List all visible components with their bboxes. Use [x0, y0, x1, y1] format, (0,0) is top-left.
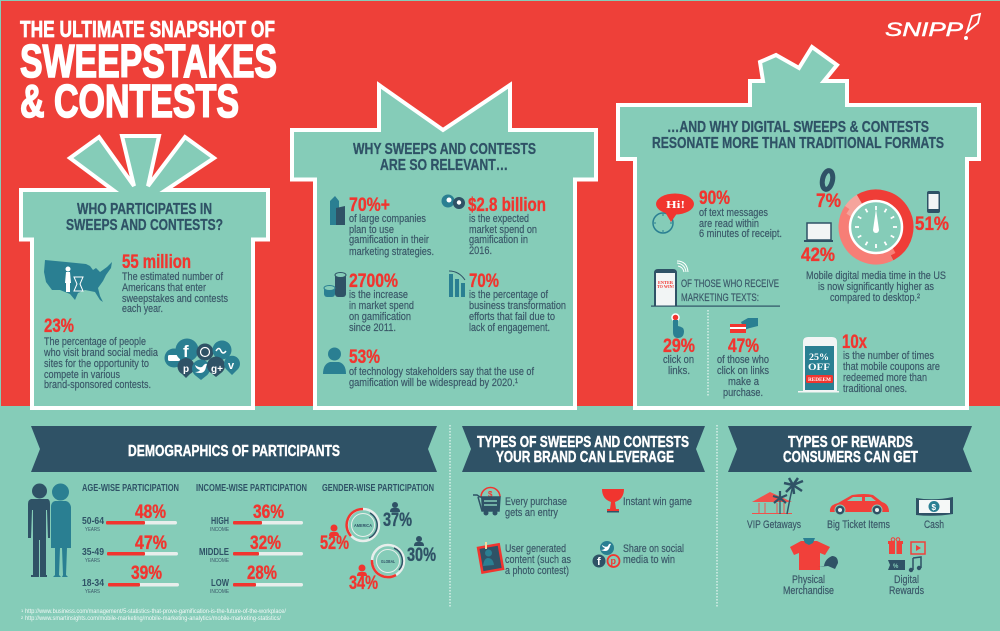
text: digital rewards: Digital — [894, 574, 919, 586]
icon: laptop — [804, 223, 833, 242]
icon: enter to win phone — [654, 261, 688, 306]
logo: Snipp: SNIPP — [885, 20, 963, 41]
icon: coupon phone: OFF — [808, 363, 830, 373]
stat: 70%+ — [349, 195, 434, 258]
stat: 70%: lack of engagement. — [469, 322, 550, 334]
chart: age-wise participation: AGE-WISE PARTICIPATION — [82, 483, 179, 494]
stat: 53% — [349, 347, 535, 389]
icon: phone — [927, 191, 940, 213]
stat: 90%: 6 minutes of receipt. — [699, 228, 782, 240]
icon: social media bubbles: p — [183, 364, 189, 375]
stat: 29% — [663, 336, 695, 377]
text: physical merchandise — [783, 574, 834, 597]
title: & CONTESTS — [20, 75, 239, 127]
icon: coupon phone: 25% — [809, 353, 829, 363]
banner: types of rewards — [728, 426, 972, 472]
stat: 47%: purchase. — [723, 387, 763, 399]
stat: 23%: compete in various — [44, 369, 120, 381]
row high: HIGH — [211, 516, 229, 527]
footnotes: 2 — [21, 615, 24, 620]
footnotes — [21, 608, 286, 622]
icon: enter to win phone: TO WIN! — [657, 285, 674, 289]
stat: 2700%: in market spend — [349, 300, 414, 312]
row 50-64: 48% — [135, 502, 166, 523]
stat: 2.8 billion: $2.8 billion — [468, 195, 546, 216]
gift shape left — [21, 136, 268, 408]
stat: 55 million — [122, 252, 228, 315]
stat: 55 million: each year. — [122, 303, 163, 315]
heading: why relevant — [353, 141, 536, 174]
stat: 23% — [43, 316, 159, 391]
row 50-64 — [82, 502, 177, 533]
stat: 29%: click on — [663, 354, 694, 366]
stat: 29%: links. — [668, 365, 690, 377]
label: 37%: 37% — [383, 510, 412, 531]
text: share on social: media to win — [623, 554, 675, 566]
text: digital rewards — [889, 574, 924, 597]
icon: trophy — [602, 489, 624, 512]
row 35-49: 47% — [135, 533, 167, 554]
banner: types of sweeps: YOUR BRAND CAN LEVERAGE — [496, 449, 674, 466]
label: Big Ticket Items: Big Ticket Items — [827, 519, 890, 531]
icon: coupon phone — [798, 337, 839, 392]
icon: social media bubbles: f — [183, 342, 189, 361]
banner: types of rewards: CONSUMERS CAN GET — [783, 449, 918, 466]
icon: digital rewards: % — [893, 564, 899, 570]
row high: INCOME — [210, 527, 229, 533]
banner: demographics — [31, 426, 437, 472]
icon: declining bar chart — [449, 271, 465, 297]
icon: hand with credit card — [730, 318, 758, 333]
row 18-34: YEARS — [85, 589, 100, 595]
stat: 23%: 23% — [44, 316, 74, 337]
stat: 2.8 billion: is the expected — [469, 213, 529, 225]
icon: man and woman — [28, 484, 71, 577]
row low: LOW — [211, 578, 229, 589]
text: of those who receive: OF THOSE WHO RECEIVE — [681, 278, 779, 290]
heading: why digital: …AND WHY DIGITAL SWEEPS & CONTESTS — [667, 119, 929, 136]
icon: social share: f — [597, 556, 601, 568]
text: mobile digital media: compared to desktop.² — [830, 292, 920, 304]
stat: 2700%: since 2011. — [349, 322, 396, 334]
stat: 10x: that mobile coupons are — [843, 361, 940, 373]
icon: social media bubbles — [164, 338, 240, 380]
stat: 70%: business transformation — [469, 300, 566, 312]
row low: 28% — [247, 563, 277, 584]
icon: coin stacks — [324, 272, 346, 297]
ring: America: AMERICA — [354, 523, 373, 528]
banner: types of sweeps — [462, 426, 705, 472]
text: user generated: User generated — [505, 543, 566, 555]
text: every purchase: gets an entry — [505, 507, 558, 519]
stat: 10x — [842, 332, 940, 395]
text: user generated: a photo contest) — [505, 565, 569, 577]
panel: who participates — [21, 136, 268, 408]
red header background — [1, 1, 1000, 406]
row high: 36% — [253, 502, 284, 523]
stat: 70%: 70% — [469, 271, 499, 292]
stat: 47%: click on links — [717, 365, 769, 377]
banner: demographics: DEMOGRAPHICS OF PARTICIPANTS — [128, 443, 340, 460]
icon: cash — [916, 497, 953, 516]
stat: 2.8 billion: gamification in — [469, 234, 528, 246]
icon: beach hut with palms — [752, 478, 803, 514]
chart: gender-wise participation — [320, 483, 436, 594]
icon: touch finger — [672, 314, 684, 338]
stat: 55 million: sweepstakes and contests — [122, 293, 228, 305]
stat: 55 million: Americans that enter — [122, 282, 206, 294]
label: 52%: 52% — [320, 533, 349, 554]
stat: 53%: gamification will be widespread by 2020.¹ — [349, 377, 518, 389]
icon: photo — [478, 542, 503, 573]
stat: 2.8 billion: 2016. — [469, 245, 492, 257]
text: share on social — [623, 543, 684, 566]
text: every purchase — [505, 496, 567, 519]
gift shape right — [618, 47, 979, 408]
icon: person navy global — [414, 536, 424, 546]
text: user generated — [505, 543, 571, 577]
text: digital rewards: Rewards — [889, 585, 924, 597]
stat: 2.8 billion: market spend on — [469, 224, 537, 236]
stat: 55 million: 55 million — [122, 252, 191, 273]
stat: 23%: brand-sponsored contests. — [44, 379, 151, 391]
dotted separators — [450, 425, 717, 608]
stat: 70% — [469, 271, 566, 334]
stat: 90% — [699, 188, 782, 240]
footnotes: 1 — [21, 608, 24, 613]
stat: 90%: 90% — [699, 188, 730, 209]
chart: mobile media donut — [832, 183, 920, 271]
icon: enter to win phone: ENTER — [658, 281, 673, 285]
row 35-49 — [82, 533, 178, 564]
heading: why relevant: ARE SO RELEVANT… — [380, 157, 508, 174]
stat: 47%: make a — [728, 376, 760, 388]
heading: who participates — [66, 201, 223, 234]
banner: types of rewards: TYPES OF REWARDS — [788, 434, 913, 451]
label: 34%: 34% — [349, 573, 378, 594]
text: physical merchandise: Merchandise — [783, 585, 834, 597]
stat: 47%: of those who — [717, 354, 769, 366]
chart: gender-wise participation: GENDER-WISE PARTICIPATION — [322, 483, 434, 494]
chart: income-wise participation — [196, 483, 307, 595]
icon: Hi bubble and clock: Hi! — [666, 199, 685, 211]
icon: person navy — [390, 502, 400, 512]
stat: 29%: 29% — [663, 336, 695, 357]
icon: shirt and cap — [790, 538, 838, 570]
text: mobile digital media: is now significantly higher as — [818, 281, 934, 293]
stat: 47% — [717, 336, 769, 399]
stat: 2700%: on gamification — [349, 311, 411, 323]
row 50-64: 50-64 — [82, 516, 104, 527]
stat: 23%: The percentage of people — [44, 336, 146, 348]
ring: Global: GLOBAL — [381, 559, 395, 564]
icon: shopping cart with coin — [473, 488, 500, 516]
icon: US map with figure and trophy — [44, 260, 112, 302]
row 18-34: 18-34 — [82, 578, 104, 589]
heading: who participates: WHO PARTICIPATES IN — [77, 201, 212, 218]
panel: why digital — [618, 47, 979, 408]
stat: 10x: redeemed more than — [843, 372, 927, 384]
stat: 53%: of technology stakeholders say that the use of — [349, 366, 535, 378]
row middle: 32% — [250, 533, 281, 554]
stat: 70%: is the percentage of — [469, 289, 549, 301]
stat: 70%+: of large companies — [349, 213, 426, 225]
icon: social share: p — [610, 556, 616, 566]
icon: cash: $ — [932, 503, 936, 512]
stat: 10x: is the number of times — [843, 350, 934, 362]
text: user generated: content (such as — [505, 554, 571, 566]
stat: 2700%: 2700% — [349, 271, 398, 292]
icon: shopping cart with coin: $ — [488, 490, 493, 499]
icon: car — [830, 494, 889, 515]
row 50-64: YEARS — [85, 527, 100, 533]
text: physical merchandise: Physical — [792, 574, 825, 586]
footnotes: http://www.business.com/management/5-statistics-that-prove-gamification-is-the-future-of-the-workplace/ — [25, 609, 286, 615]
stat: 23%: who visit brand social media — [43, 347, 159, 359]
row 18-34: 39% — [131, 563, 162, 584]
title: THE ULTIMATE SNAPSHOT OF — [20, 16, 275, 42]
icon: person red global — [357, 564, 367, 576]
stat: 10x: 10x — [842, 332, 867, 353]
icon: person with glasses — [323, 348, 346, 374]
logo: Snipp — [885, 14, 980, 41]
stat: 70%+: gamification in their — [349, 234, 429, 246]
icon: buildings — [330, 196, 345, 225]
text: instant win game: Instant win game — [623, 496, 692, 508]
label: 7%: 7% — [816, 191, 841, 212]
row middle: MIDDLE — [199, 547, 229, 558]
stat: 70%: efforts that fail due to — [469, 311, 555, 323]
row middle — [199, 533, 303, 564]
panel: why relevant — [292, 85, 596, 408]
chart: age-wise participation — [82, 483, 179, 595]
text: mobile digital media — [806, 270, 946, 304]
icon: social share — [592, 541, 620, 568]
text: every purchase: Every purchase — [505, 496, 567, 508]
row high — [210, 502, 303, 533]
stat: 2700% — [349, 271, 414, 334]
row 35-49: 35-49 — [82, 547, 104, 558]
heading: why digital — [652, 119, 944, 152]
icon: coins — [442, 194, 465, 209]
stat: 2700%: is the increase — [349, 289, 408, 301]
stat: 2.8 billion — [468, 195, 546, 257]
row 18-34 — [82, 563, 179, 595]
stat: 70%+: 70%+ — [349, 195, 390, 216]
row low: INCOME — [210, 589, 229, 595]
stat: 10x: traditional ones. — [843, 383, 907, 395]
text: of those who receive: MARKETING TEXTS: — [681, 292, 759, 304]
label: Cash: Cash — [924, 519, 944, 531]
stat: 90%: are read within — [699, 218, 759, 230]
banner: types of sweeps: TYPES OF SWEEPS AND CONTESTS — [477, 434, 689, 451]
row low — [210, 563, 303, 595]
label: VIP Getaways: VIP Getaways — [747, 519, 801, 531]
icon: person red — [329, 524, 339, 536]
footnotes: http://www.smartinsights.com/mobile-marketing/mobile-marketing-analytics/mobile-marketing-statistics/ — [25, 616, 281, 622]
title: SWEEPSTAKES — [20, 35, 277, 87]
icon: coupon phone: REDEEM — [808, 378, 831, 383]
icon: fitness band — [821, 170, 834, 190]
heading: why relevant: WHY SWEEPS AND CONTESTS — [353, 141, 536, 158]
icon: digital rewards — [888, 538, 925, 572]
text: mobile digital media: Mobile digital media time in the US — [806, 270, 946, 282]
text: share on social: Share on social — [623, 543, 684, 555]
chart: income-wise participation: INCOME-WISE PARTICIPATION — [196, 483, 307, 494]
label: 42%: 42% — [801, 245, 835, 266]
stat: 55 million: The estimated number of — [122, 271, 224, 283]
row 35-49: YEARS — [85, 558, 100, 564]
title — [20, 16, 277, 127]
row middle: INCOME — [210, 558, 229, 564]
stat: 23%: sites for the opportunity to — [44, 358, 149, 370]
stat: 47%: 47% — [728, 336, 759, 357]
stat: 70%+: marketing strategies. — [349, 246, 434, 258]
icon: social media bubbles: g+ — [211, 364, 223, 375]
stat: 90%: of text messages — [699, 207, 768, 219]
label: 30%: 30% — [407, 545, 436, 566]
stat: 70%+: plan to use — [349, 224, 394, 236]
icon: Hi bubble and clock — [653, 194, 694, 233]
icon: social media bubbles: v — [228, 360, 235, 372]
stat: 53%: 53% — [349, 347, 380, 368]
gift shape middle — [292, 85, 596, 408]
text: of those who receive — [681, 278, 779, 304]
label: 51%: 51% — [915, 214, 949, 235]
heading: who participates: SWEEPS AND CONTESTS? — [66, 217, 223, 234]
